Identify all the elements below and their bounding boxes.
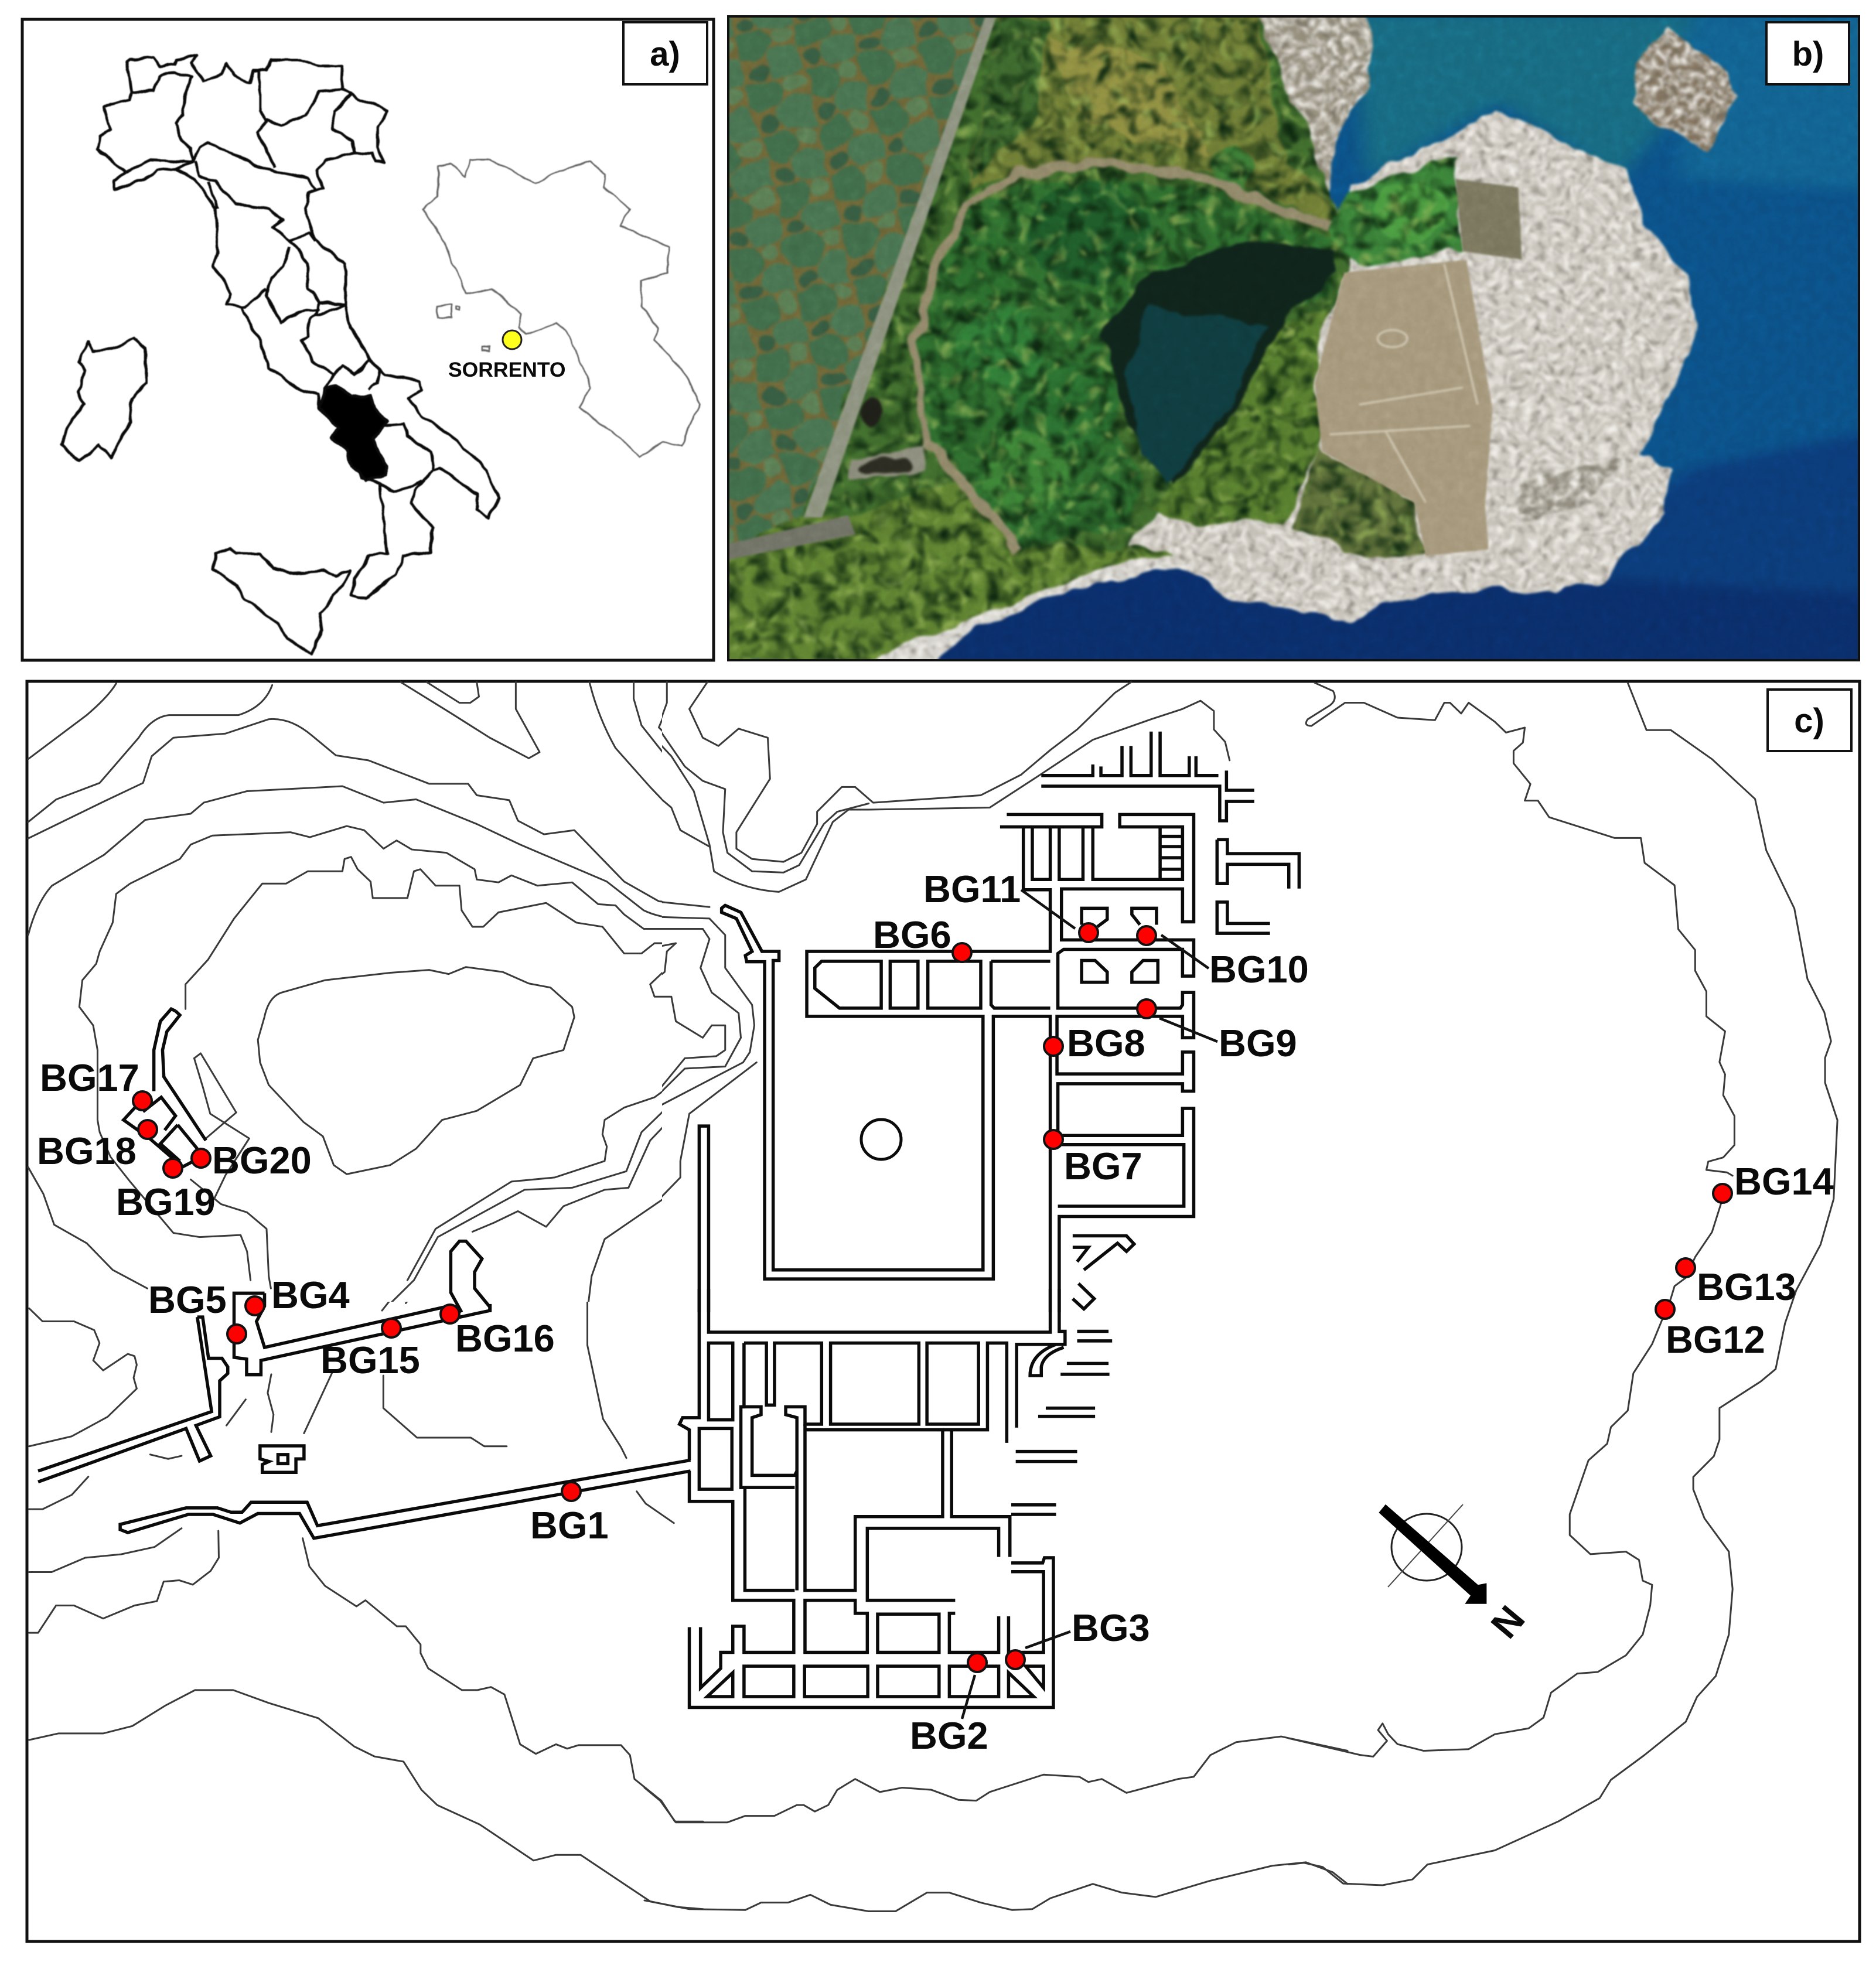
villa gardens [1329,155,1463,264]
south shore strip [855,554,1196,664]
BG17: BG17 [40,1056,139,1099]
compass circle [1391,1514,1462,1581]
contours: north-centre [644,683,1230,1214]
BG11 [923,868,1098,942]
courtyard well [861,1120,901,1159]
cove water [1124,306,1267,486]
contours: east coast [1289,683,1837,1885]
panel a: map of Italy with Campania inset [22,19,714,660]
BG6 [873,913,971,962]
land and rock shapes [693,4,1741,664]
cliff vegetation [1152,302,1329,524]
BG19 [116,1159,216,1223]
BG9 [1137,999,1297,1064]
arch structure [855,445,926,482]
walls: corridors and west buildings [38,1293,691,1538]
panel b: aerial photo of the site [693,4,1876,681]
BG6: BG6 [873,913,951,956]
BG12 [1656,1300,1765,1361]
north hillside [967,9,1329,221]
BG18 [37,1120,157,1172]
long wall [804,17,996,517]
BG2: BG2 [910,1714,988,1757]
BG15: BG15 [320,1339,420,1381]
region outlines [60,56,499,654]
label: SORRENTO: SORRENTO [448,358,566,381]
compass cross line [1388,1504,1463,1587]
BG20: BG20 [212,1139,312,1182]
walls: villa south block [680,1289,1112,1707]
tag c): c) [1794,702,1824,740]
terrace markings [1329,264,1478,503]
BG10: BG10 [1209,948,1309,991]
icon: north compass [1379,1504,1533,1646]
contour lines [28,683,1837,1911]
contours: north-west [28,683,680,1312]
contours: south-west [29,1289,703,1909]
BG2 [910,1653,988,1757]
BG4: BG4 [271,1274,350,1316]
BG16 [441,1305,555,1360]
BG1: BG1 [530,1504,609,1547]
tag a) [623,22,707,84]
panel b frame [728,16,1859,660]
panel a frame [22,19,714,660]
contours: south-centre [644,1736,1348,1911]
BG5 [148,1278,246,1343]
tag b): b) [1792,35,1824,73]
upper rocks [1256,9,1374,192]
tag b) [1766,22,1849,84]
BG9: BG9 [1219,1022,1297,1064]
sea [728,16,1859,660]
BG5: BG5 [148,1278,227,1321]
BG7 [1044,1130,1142,1187]
BG3: BG3 [1072,1606,1150,1649]
BG3 [1006,1606,1150,1669]
BG15 [320,1319,420,1381]
BG11: BG11 [923,868,1021,910]
tag c) [1768,690,1851,751]
north arrow [1379,1504,1486,1604]
BG13: BG13 [1697,1265,1796,1308]
sampling points BG1 to BG20 [37,868,1834,1757]
forest [919,179,1329,550]
olive grove [715,6,996,554]
BG16: BG16 [455,1317,555,1360]
map: Campania outline inset [422,160,700,458]
peninsula [1115,113,1696,622]
BG1 [530,1482,609,1547]
sea tones [900,13,1876,681]
BG18: BG18 [37,1129,137,1172]
land base [693,4,1352,664]
map: Italy regions [60,56,700,654]
rock shadow area [1518,460,1633,528]
letter N: N [1483,1598,1533,1646]
below terrace scrub [1292,452,1425,558]
lower-left scrub [693,482,1174,664]
BG10 [1137,926,1309,991]
photo: painted aerial view [693,4,1876,681]
man-made straight features [715,17,1522,562]
footpath [915,164,1329,550]
cove shadow [1100,238,1333,486]
panel c: site plan with sampling points [27,681,1860,1941]
BG12: BG12 [1666,1318,1765,1361]
walls: west structures [124,1009,490,1312]
texture overlay [728,16,1859,660]
tree crowns [957,147,1448,513]
BG7: BG7 [1064,1145,1142,1187]
terrace [1315,260,1492,556]
BG19: BG19 [116,1180,216,1223]
small island [1633,26,1741,149]
panel c frame [27,681,1860,1941]
road end [715,516,855,562]
tag a): a) [650,35,680,73]
vegetation group [693,4,1463,664]
walls: villa north block [699,732,1299,1312]
villa ruins [1455,179,1522,260]
BG8: BG8 [1067,1022,1145,1064]
marker: Sorrento location [503,330,521,349]
BG14: BG14 [1734,1160,1834,1203]
rock group [855,9,1741,664]
